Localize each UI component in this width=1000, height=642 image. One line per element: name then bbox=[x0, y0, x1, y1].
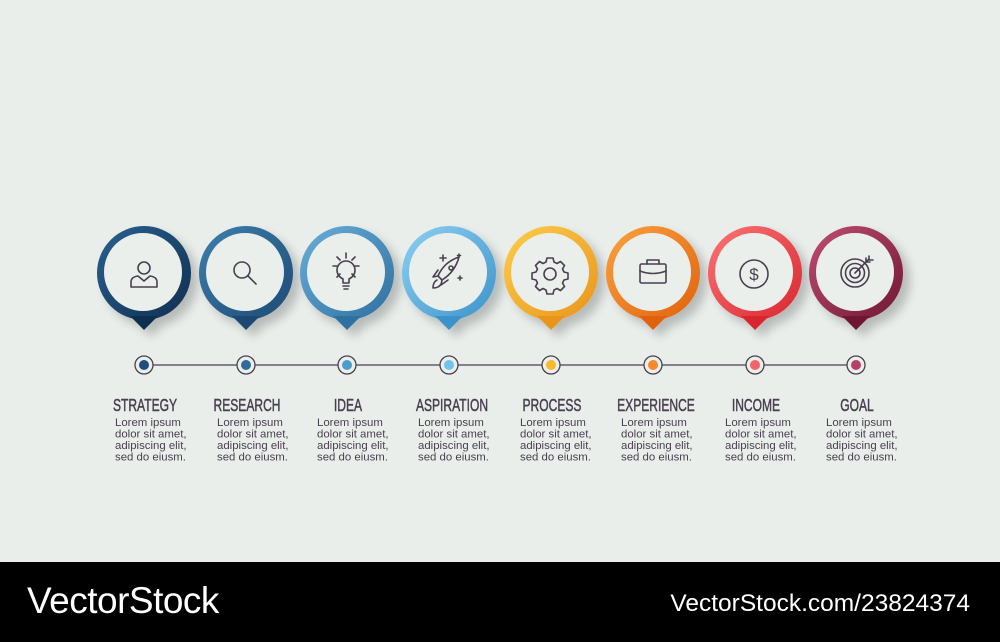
step 2: research bbox=[199, 226, 293, 464]
label: idea: dolor sit amet, bbox=[317, 428, 389, 440]
label: research: dolor sit amet, bbox=[217, 428, 289, 440]
step 3: idea bbox=[300, 226, 394, 464]
footer logo: VectorStock bbox=[27, 580, 220, 621]
label: experience: EXPERIENCE bbox=[617, 396, 695, 416]
label: experience: Lorem ipsum bbox=[621, 417, 687, 429]
label: income: adipiscing elit, bbox=[725, 440, 797, 452]
label: research: Lorem ipsum bbox=[217, 417, 283, 429]
label: income: sed do eiusm. bbox=[725, 452, 796, 464]
label: experience bbox=[617, 396, 695, 464]
pin: aspiration bbox=[402, 226, 496, 330]
label: experience: dolor sit amet, bbox=[621, 428, 693, 440]
label: goal: Lorem ipsum bbox=[826, 417, 892, 429]
dot bbox=[338, 356, 356, 374]
label: research: RESEARCH bbox=[214, 396, 280, 416]
icon: target bbox=[841, 256, 873, 287]
label: strategy: STRATEGY bbox=[113, 396, 177, 416]
label: income: INCOME bbox=[732, 396, 780, 416]
label: research bbox=[214, 396, 289, 464]
pin: goal bbox=[809, 226, 903, 330]
label: idea: sed do eiusm. bbox=[317, 452, 388, 464]
label: income: Lorem ipsum bbox=[725, 417, 791, 429]
label: idea bbox=[317, 396, 389, 464]
dot bbox=[135, 356, 153, 374]
pin: research bbox=[199, 226, 293, 330]
icon: dollar coin bbox=[740, 260, 768, 288]
label: goal bbox=[826, 396, 898, 464]
dot bbox=[237, 356, 255, 374]
pin: strategy bbox=[97, 226, 191, 330]
step 5: process bbox=[504, 226, 598, 464]
pin: idea bbox=[300, 226, 394, 330]
label: process: dolor sit amet, bbox=[520, 428, 592, 440]
dot bbox=[440, 356, 458, 374]
label: aspiration bbox=[416, 396, 490, 464]
footer band bbox=[0, 562, 1000, 642]
label: idea: adipiscing elit, bbox=[317, 440, 389, 452]
icon: dollar coin: $ bbox=[749, 265, 759, 284]
label: goal: sed do eiusm. bbox=[826, 452, 897, 464]
label: experience: sed do eiusm. bbox=[621, 452, 692, 464]
label: process bbox=[520, 396, 592, 464]
dot bbox=[746, 356, 764, 374]
dot bbox=[542, 356, 560, 374]
label: income bbox=[725, 396, 797, 464]
label: income: dolor sit amet, bbox=[725, 428, 797, 440]
label: strategy: Lorem ipsum bbox=[115, 417, 181, 429]
label: process: sed do eiusm. bbox=[520, 452, 591, 464]
icon: lightbulb bbox=[333, 253, 359, 289]
pin: experience bbox=[606, 226, 700, 330]
step 1: strategy bbox=[97, 226, 191, 464]
label: strategy: sed do eiusm. bbox=[115, 452, 186, 464]
timeline line bbox=[144, 364, 856, 366]
icon: magnifier bbox=[234, 262, 256, 284]
label: idea: Lorem ipsum bbox=[317, 417, 383, 429]
step 8: goal bbox=[809, 226, 903, 464]
dot bbox=[847, 356, 865, 374]
label: goal: GOAL bbox=[840, 396, 874, 416]
dot bbox=[644, 356, 662, 374]
label: aspiration: dolor sit amet, bbox=[418, 428, 490, 440]
label: strategy: adipiscing elit, bbox=[115, 440, 187, 452]
label: research: adipiscing elit, bbox=[217, 440, 289, 452]
label: aspiration: Lorem ipsum bbox=[418, 417, 484, 429]
label: aspiration: sed do eiusm. bbox=[418, 452, 489, 464]
step 7: income bbox=[708, 226, 802, 464]
step 6: experience bbox=[606, 226, 700, 464]
icon: rocket bbox=[433, 254, 462, 288]
label: process: PROCESS bbox=[523, 396, 581, 416]
label: idea: IDEA bbox=[334, 396, 363, 416]
step 4: aspiration bbox=[402, 226, 496, 464]
pin: process bbox=[504, 226, 598, 330]
icon: gear bbox=[532, 258, 568, 294]
label: process: adipiscing elit, bbox=[520, 440, 592, 452]
label: goal: adipiscing elit, bbox=[826, 440, 898, 452]
label: aspiration: ASPIRATION bbox=[416, 396, 488, 416]
label: experience: adipiscing elit, bbox=[621, 440, 693, 452]
label: goal: dolor sit amet, bbox=[826, 428, 898, 440]
icon: person bbox=[131, 262, 157, 287]
label: process: Lorem ipsum bbox=[520, 417, 586, 429]
icon: briefcase bbox=[640, 260, 666, 283]
label: aspiration: adipiscing elit, bbox=[418, 440, 490, 452]
pin: income bbox=[708, 226, 802, 330]
label: strategy: dolor sit amet, bbox=[115, 428, 187, 440]
label: research: sed do eiusm. bbox=[217, 452, 288, 464]
label: strategy bbox=[113, 396, 187, 464]
footer url: VectorStock.com/23824374 bbox=[670, 590, 970, 617]
